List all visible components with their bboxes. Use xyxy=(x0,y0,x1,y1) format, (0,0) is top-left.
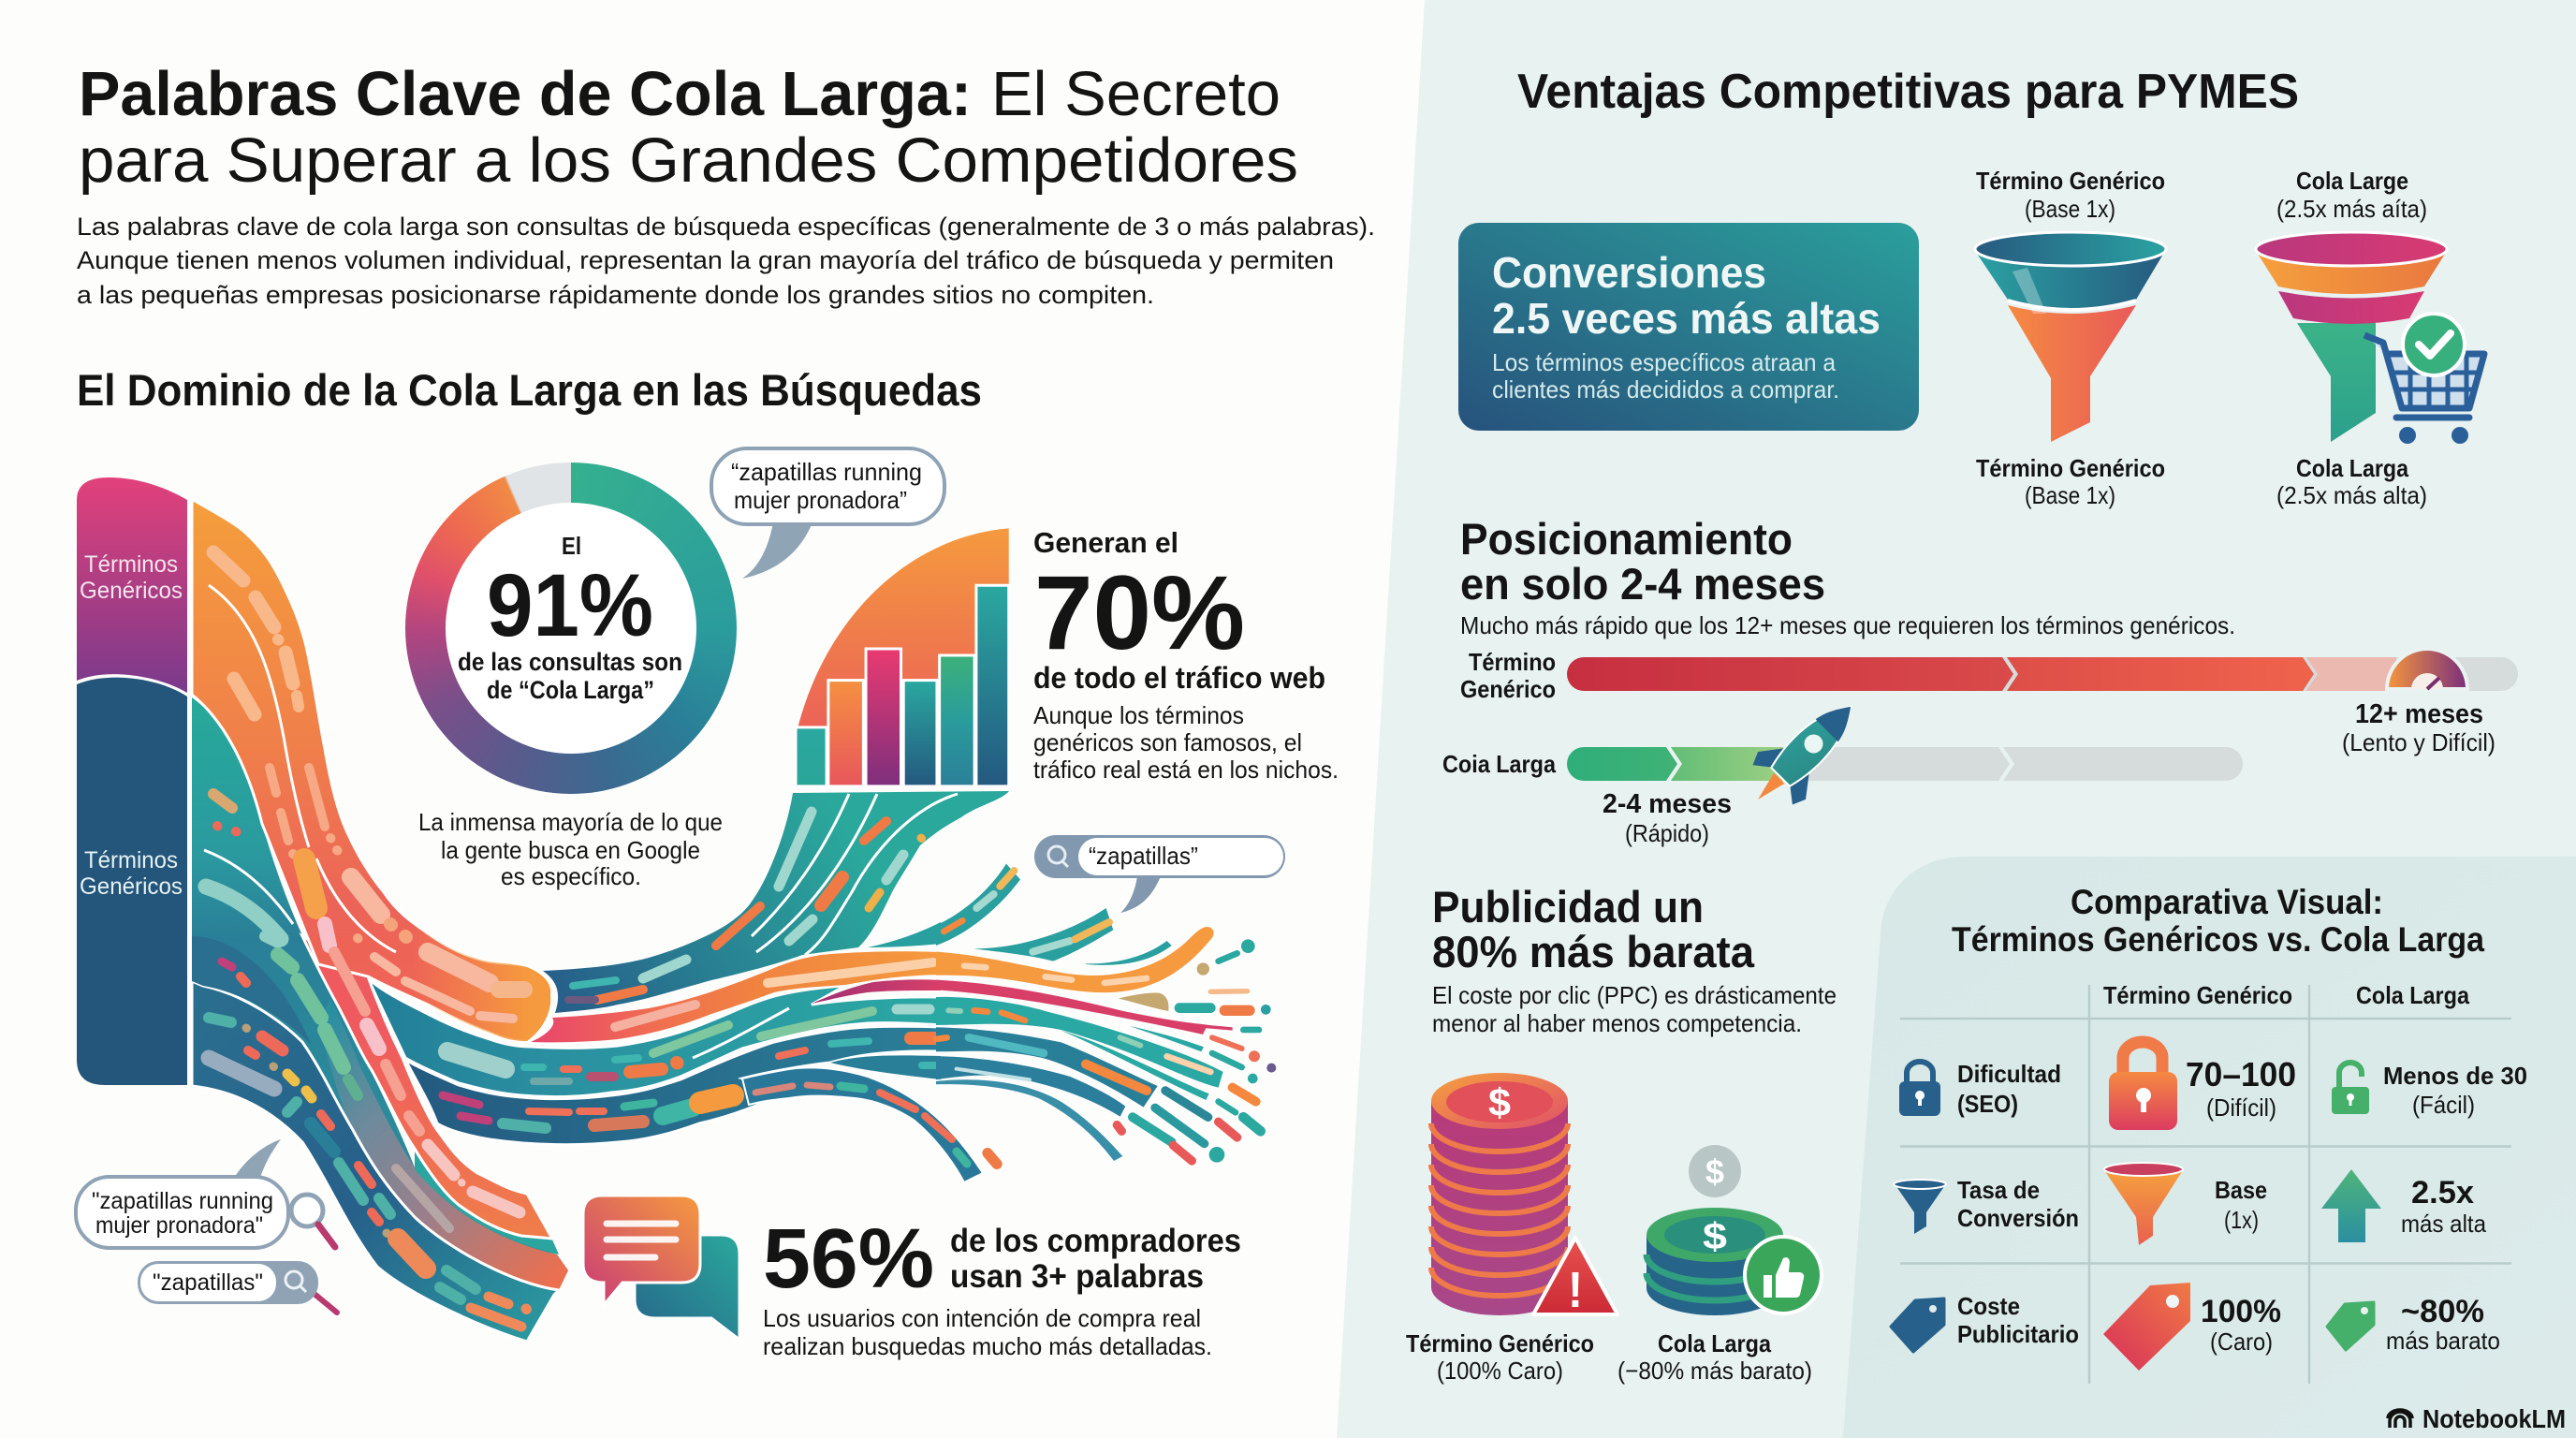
row: conversión label: Conversión xyxy=(1957,1204,2079,1232)
icon: funnel generic xyxy=(1975,232,2166,442)
funnel labels: top left: (Base 1x) xyxy=(2025,195,2115,223)
icon: small coin stack xyxy=(1647,1208,1783,1315)
section heading: dominio: El Dominio de la Cola Larga en las Búsquedas xyxy=(77,365,982,415)
stat: 56%: 56% xyxy=(763,1212,934,1306)
stat: 70%: 70% xyxy=(1034,554,1245,671)
table header: Cola Larga xyxy=(2356,981,2469,1009)
timeline: cola larga xyxy=(1442,747,2243,781)
heading: publicidad xyxy=(1432,882,1755,976)
ribbon: teal base from block xyxy=(192,697,568,1342)
timeline: término genérico: Término xyxy=(1469,648,1556,676)
icon: grey coin: $ xyxy=(1705,1152,1724,1191)
bar chart: 70% xyxy=(796,528,1009,786)
heading: comparativa visual xyxy=(1952,883,2484,959)
heading: comparativa visual: Términos Genéricos vs. Cola Larga xyxy=(1952,920,2484,959)
row: dificultad cola larga: Menos de 30 xyxy=(2383,1062,2527,1090)
stat: 56%: usan 3+ palabras xyxy=(950,1258,1204,1295)
icon: funnel long tail with cart xyxy=(2256,232,2484,444)
title xyxy=(79,59,1298,196)
icon: warning triangle xyxy=(1533,1238,1617,1318)
ribbon: red to orange xyxy=(531,951,941,1042)
row: conversión cola larga: 2.5x xyxy=(2411,1175,2474,1211)
icon: big coin stack: $ xyxy=(1488,1080,1511,1124)
ribbon: main orange xyxy=(192,499,550,1041)
row: dificultad generic: (Difícil) xyxy=(2206,1093,2276,1122)
donut text: El xyxy=(562,532,581,560)
row: coste cola larga xyxy=(2327,1294,2500,1355)
ribbon: thin navy xyxy=(830,1055,941,1079)
intro paragraph: Aunque tienen menos volumen individual, representan la gran mayoría del tráfico de búsqueda y permiten xyxy=(77,246,1334,274)
timeline: cola larga: Coia Larga xyxy=(1442,750,1556,778)
funnel labels: top right: Cola Large xyxy=(2296,167,2408,195)
funnel labels: bottom left: (Base 1x) xyxy=(2025,481,2115,509)
funnel labels: top right xyxy=(2276,167,2427,223)
comparison table xyxy=(1891,981,2527,1384)
timeline label: 2-4 meses: 2-4 meses xyxy=(1603,789,1732,819)
row: dificultad label: Dificultad xyxy=(1957,1060,2061,1088)
funnel labels: top right: (2.5x más aíta) xyxy=(2276,195,2427,223)
block: términos genéricos top xyxy=(77,477,187,693)
speech bubble: long query: mujer pronadora” xyxy=(734,486,907,514)
funnel labels: bottom right: Cola Larga xyxy=(2296,454,2408,482)
row: conversión generic xyxy=(2104,1163,2267,1245)
row: conversión generic: Base xyxy=(2215,1176,2267,1204)
funnel labels: top left: Término Genérico xyxy=(1976,167,2165,195)
timeline: término genérico: Genérico xyxy=(1460,675,1556,703)
title: Palabras Clave de Cola Larga: xyxy=(79,59,972,129)
row: dificultad generic: 70–100 xyxy=(2186,1055,2296,1093)
ribbon: navy upper left xyxy=(192,936,312,1046)
icon: grey coin xyxy=(1689,1145,1741,1197)
table header xyxy=(2103,981,2469,1009)
row: coste cola larga: ~80% xyxy=(2401,1294,2484,1329)
donut text: de las consultas son xyxy=(458,648,682,676)
donut text: de “Cola Larga” xyxy=(487,676,654,704)
card: conversiones: clientes más decididos a comprar. xyxy=(1492,375,1839,404)
stat: 70%: Generan el xyxy=(1033,526,1178,559)
heading: posicionamiento xyxy=(1460,514,1825,609)
ribbon: up to bar chart xyxy=(543,791,1009,1013)
heading: publicidad: Publicidad un xyxy=(1432,882,1704,932)
cart xyxy=(2364,335,2484,444)
row: conversión label: Tasa de xyxy=(1957,1176,2040,1204)
timeline label: 2-4 meses xyxy=(1603,789,1732,847)
donut caption: La inmensa mayoría de lo que xyxy=(418,808,723,836)
search pill: lower left xyxy=(138,1261,337,1313)
timeline label: 12+ meses: (Lento y Difícil) xyxy=(2342,728,2496,756)
white ribbon separators xyxy=(204,585,958,1058)
ribbon: grey to coral xyxy=(318,999,568,1290)
card: conversiones: Conversiones xyxy=(1492,248,1766,297)
row: coste label xyxy=(1891,1292,2079,1352)
icon: rocket xyxy=(1734,682,1875,823)
speech bubble: lower left long query: mujer pronadora" xyxy=(95,1212,263,1239)
row: conversión generic: (1x) xyxy=(2224,1206,2259,1234)
ribbon: main teal xyxy=(368,978,941,1097)
row: coste generic: (Caro) xyxy=(2210,1328,2273,1356)
right background panel xyxy=(1337,0,2576,1438)
intro paragraph: a las pequeñas empresas posicionarse rápidamente donde los grandes sitios no compiten. xyxy=(77,281,1154,309)
stat: 56%: de los compradores xyxy=(950,1223,1241,1259)
timeline label: 12+ meses xyxy=(2342,699,2496,756)
heading: posicionamiento: en solo 2-4 meses xyxy=(1460,559,1825,609)
text: coste por clic xyxy=(1432,981,1837,1037)
speech bubble: lower left long query: "zapatillas running xyxy=(92,1188,273,1214)
table header: Término Genérico xyxy=(2103,981,2292,1009)
text: mucho más rápido: Mucho más rápido que los 12+ meses que requieren los términos genéricos. xyxy=(1460,611,2235,639)
row: coste label: Coste xyxy=(1957,1292,2020,1320)
ribbon: navy band xyxy=(405,1026,941,1145)
funnel labels: bottom left: Término Genérico xyxy=(1976,454,2165,482)
stat: 70% xyxy=(1033,526,1339,784)
row: dificultad cola larga xyxy=(2332,1062,2527,1119)
row: coste generic xyxy=(2103,1283,2281,1371)
text: coste por clic: menor al haber menos competencia. xyxy=(1432,1009,1802,1037)
timeline label: 12+ meses: 12+ meses xyxy=(2355,699,2483,729)
donut caption: la gente busca en Google xyxy=(441,836,700,864)
row: dificultad cola larga: (Fácil) xyxy=(2412,1091,2475,1119)
icon: chat bubbles xyxy=(583,1196,739,1340)
icon: small coin stack: $ xyxy=(1703,1216,1727,1257)
row: coste label: Publicitario xyxy=(1957,1320,2079,1348)
donut caption: es específico. xyxy=(501,862,641,890)
ribbon dashes xyxy=(213,552,293,714)
ribbon: teal stripe xyxy=(415,1152,559,1255)
donut caption xyxy=(418,808,723,890)
coin label: cola larga: Cola Larga xyxy=(1658,1329,1771,1357)
heading: comparativa visual: Comparativa Visual: xyxy=(2071,883,2383,921)
coin label: término genérico xyxy=(1406,1329,1594,1385)
search bubble: zapatillas: “zapatillas” xyxy=(1089,842,1198,870)
stat: 70%: genéricos son famosos, el xyxy=(1033,728,1302,756)
row: conversión label xyxy=(1894,1176,2079,1234)
ribbon: red descending xyxy=(302,936,552,1239)
stat: 70%: Aunque los términos xyxy=(1033,701,1244,729)
donut text xyxy=(458,532,682,704)
heading: ventajas: Ventajas Competitivas para PYMES xyxy=(1517,65,2299,119)
ribbons fan on the right xyxy=(936,864,1276,1164)
icon: thumbs up badge xyxy=(1745,1237,1822,1313)
coin label: cola larga: (−80% más barato) xyxy=(1617,1357,1812,1385)
row: dificultad label: (SEO) xyxy=(1957,1090,2018,1118)
row: coste cola larga: más barato xyxy=(2386,1327,2500,1355)
heading: publicidad: 80% más barata xyxy=(1432,927,1755,976)
icon: warning triangle: ! xyxy=(1568,1262,1583,1318)
coin label: término genérico: Término Genérico xyxy=(1406,1329,1594,1357)
funnel labels: bottom right xyxy=(2276,454,2427,509)
comparison table background panel xyxy=(1843,857,2576,1438)
stat: 70%: de todo el tráfico web xyxy=(1033,661,1325,695)
coin label: término genérico: (100% Caro) xyxy=(1437,1357,1563,1385)
icon: gauge xyxy=(2387,649,2467,689)
row: dificultad generic xyxy=(2109,1042,2296,1130)
flow ribbon chart xyxy=(77,477,1276,1342)
card: conversiones: 2.5 veces más altas xyxy=(1492,294,1881,343)
title: para Superar a los Grandes Competidores xyxy=(79,125,1298,196)
search pill: lower left: "zapatillas" xyxy=(153,1269,263,1296)
text: coste por clic: El coste por clic (PPC) es drásticamente xyxy=(1432,981,1837,1009)
card: conversiones xyxy=(1458,223,1919,431)
stat: 70%: tráfico real está en los nichos. xyxy=(1033,756,1339,784)
row: dificultad label xyxy=(1899,1060,2061,1118)
intro paragraph: Las palabras clave de cola larga son consultas de búsqueda específicas (generalmente de 3 o más palabras). xyxy=(77,213,1375,241)
ribbon: crimson thin xyxy=(812,979,941,1004)
row: conversión cola larga: más alta xyxy=(2401,1210,2486,1238)
timeline: término genérico xyxy=(1460,648,2518,703)
stat: 56%: Los usuarios con intención de compra real xyxy=(763,1304,1201,1332)
icon: big coin stack xyxy=(1431,1073,1568,1315)
funnel labels: bottom left xyxy=(1976,454,2165,509)
title: El Secreto xyxy=(991,59,1281,129)
row: coste generic: 100% xyxy=(2201,1294,2281,1329)
intro paragraph xyxy=(77,213,1375,309)
row: conversión cola larga xyxy=(2321,1169,2486,1242)
speech bubble: long query: “zapatillas running xyxy=(731,458,922,486)
stat: 56% xyxy=(763,1212,1241,1360)
block: términos genéricos bottom xyxy=(77,678,187,1085)
label: términos genéricos top: Genéricos xyxy=(80,578,183,604)
funnel labels: top left xyxy=(1976,167,2165,223)
donut text: 91% xyxy=(487,556,653,655)
card: conversiones: Los términos específicos atraan a xyxy=(1492,348,1837,376)
label: términos genéricos bottom: Genéricos xyxy=(80,873,183,900)
ribbon: lower arc xyxy=(742,1067,983,1182)
funnel labels: bottom right: (2.5x más alta) xyxy=(2276,481,2427,509)
ribbon: sprig left tip xyxy=(868,922,941,947)
ribbon: navy bottom xyxy=(192,981,559,1342)
speech bubble: long query xyxy=(711,448,944,579)
label: términos genéricos bottom: Términos xyxy=(84,847,178,873)
coin label: cola larga xyxy=(1617,1329,1812,1385)
label: términos genéricos top: Términos xyxy=(84,551,178,578)
search bubble: zapatillas xyxy=(1034,835,1285,913)
label: términos genéricos bottom xyxy=(80,847,183,900)
timeline label: 2-4 meses: (Rápido) xyxy=(1625,819,1709,847)
heading: posicionamiento: Posicionamiento xyxy=(1460,514,1793,564)
label: términos genéricos top xyxy=(80,551,183,604)
donut chart: 91% xyxy=(405,462,737,794)
stat: 56%: realizan busquedas mucho más detalladas. xyxy=(763,1332,1212,1360)
speech bubble: lower left long query xyxy=(76,1139,335,1248)
